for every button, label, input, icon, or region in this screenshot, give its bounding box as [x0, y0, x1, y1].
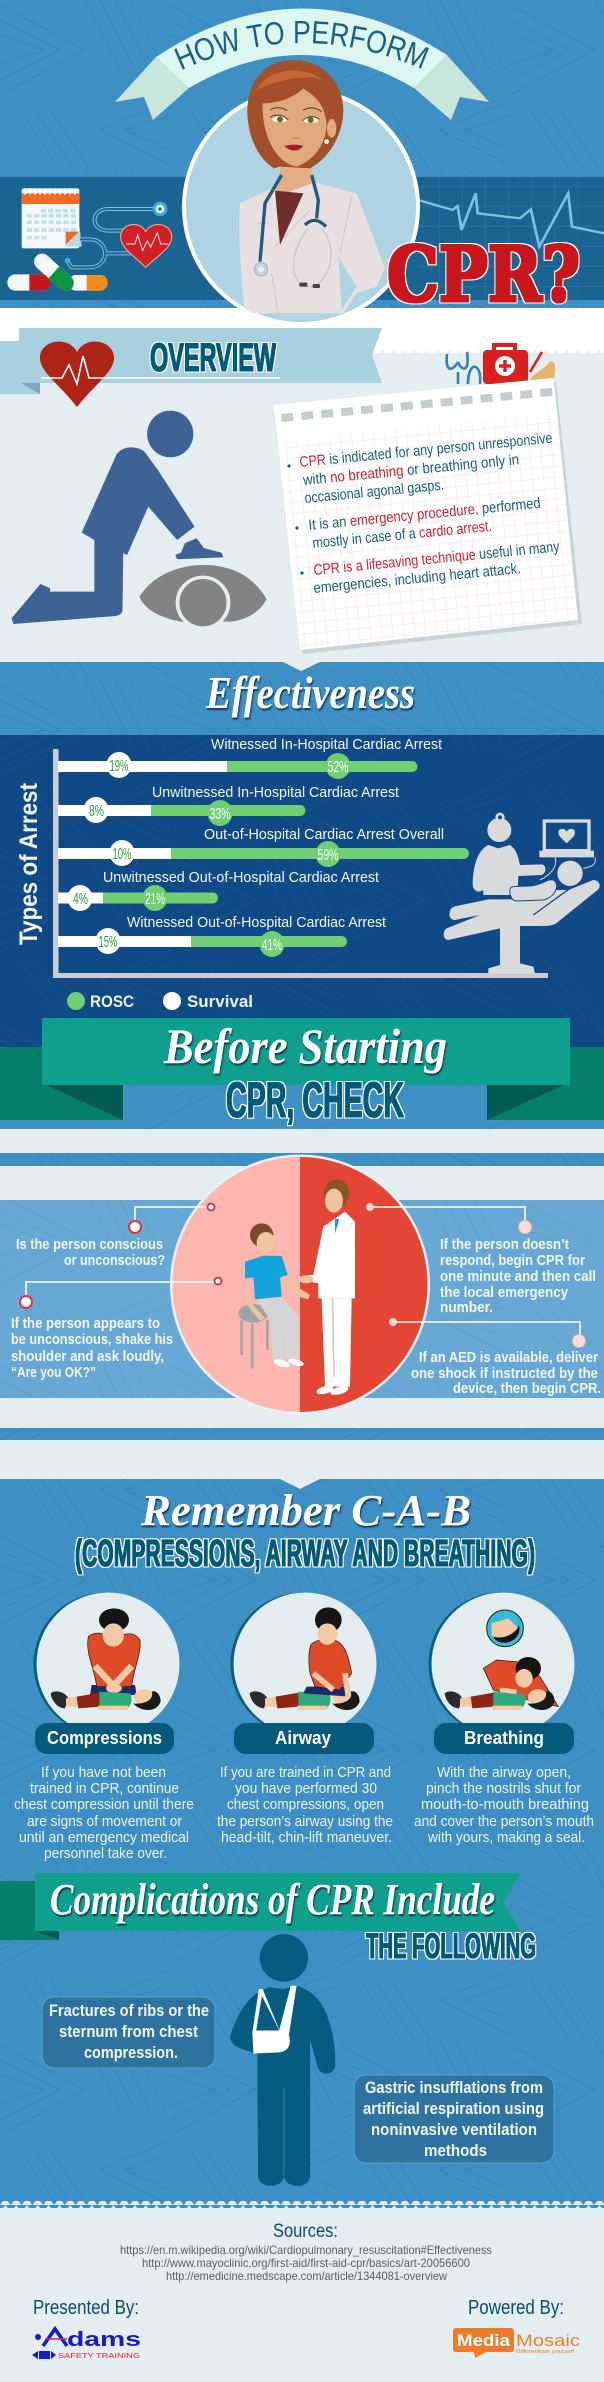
- circle illustration: [170, 1154, 430, 1414]
- y-axis title: Types of Arrest: [15, 782, 43, 945]
- step: airway: head-tilt, chin-lift maneuver.: [221, 1830, 392, 1846]
- figure: doctor: [299, 1179, 355, 1397]
- step: compressions: chest compression until there: [14, 1797, 194, 1813]
- bar: unwitnessed out-of-hospital: [58, 870, 379, 911]
- ecg monitor background: [418, 178, 604, 300]
- bar: unwitnessed in-hospital: Unwitnessed In-Hospital Cardiac Arrest: [152, 785, 399, 801]
- icon: heart: [40, 342, 280, 407]
- heading: complications: Complications of CPR Include: [50, 1875, 495, 1924]
- bar: witnessed in-hospital: 52%: [328, 759, 348, 776]
- powered by: media mosaic: Powered By:: [468, 2297, 564, 2319]
- sources: http://www.mayoclinic.org/first-aid/first-aid-cpr/basics/art-20056600: [142, 2256, 470, 2270]
- text: shake shoulder: If the person appears to: [11, 1315, 160, 1332]
- step: airway: chest compressions, open: [227, 1797, 384, 1813]
- note text: [287, 430, 561, 597]
- bar: witnessed out-of-hospital: Witnessed Out-of-Hospital Cardiac Arrest: [127, 915, 386, 931]
- presented by: adams: Presented By:: [33, 2297, 139, 2319]
- text: shake shoulder: be unconscious, shake his: [11, 1331, 173, 1348]
- step: compressions: [14, 1592, 194, 1862]
- panel: before starting ribbon: [0, 1018, 604, 1129]
- figure: chest compressions: [51, 1608, 161, 1710]
- complications ribbon: [0, 1873, 521, 1940]
- text: begin cpr: respond, begin CPR for: [440, 1252, 585, 1269]
- heading: before starting: Before Starting: [163, 1018, 447, 1074]
- presented by: adams: [32, 2297, 141, 2360]
- connector end markers: [20, 1203, 586, 1348]
- callout: fractures: [42, 1997, 215, 2068]
- text: shake shoulder: [11, 1315, 173, 1381]
- note text: CPR is a lifesaving technique useful in many: [313, 538, 561, 579]
- logo: adams safety training: SAFETY TRAINING: [58, 2353, 140, 2360]
- step: airway: If you are trained in CPR and: [220, 1765, 391, 1781]
- icon: cpr silhouette: [12, 411, 267, 628]
- step: compressions: are signs of movement or: [27, 1814, 182, 1830]
- bar: unwitnessed out-of-hospital: Unwitnessed Out-of-Hospital Cardiac Arrest: [103, 870, 379, 886]
- bar: witnessed out-of-hospital: 15%: [98, 934, 118, 951]
- step: breathing: mouth-to-mouth breathing: [421, 1797, 589, 1813]
- bar: out-of-hospital overall: Out-of-Hospital Cardiac Arrest Overall: [204, 827, 444, 843]
- figure: seated patient: [238, 1223, 310, 1369]
- title ribbon: [115, 8, 489, 120]
- bar chart: [58, 737, 469, 957]
- step: compressions: If you have not been: [41, 1765, 166, 1781]
- callout: gastric insufflations: Gastric insufflations from: [365, 2078, 543, 2097]
- chart axes: [53, 749, 548, 978]
- text: conscious check: [16, 1236, 165, 1269]
- step: breathing: with yours, making a seal.: [427, 1830, 585, 1846]
- note text: emergencies, including heart attack.: [313, 560, 521, 597]
- bar: witnessed in-hospital: [58, 737, 442, 779]
- heading: effectiveness: Effectiveness: [205, 667, 415, 718]
- icon: pills: [7, 250, 108, 294]
- callout: fractures: Fractures of ribs or the: [49, 2001, 209, 2020]
- bar: witnessed out-of-hospital: [58, 915, 386, 957]
- logo: adams safety training: dams: [67, 2329, 141, 2351]
- chart legend: Survival: [187, 992, 253, 1011]
- bar: unwitnessed out-of-hospital: 21%: [145, 891, 165, 908]
- step: compressions: personnel take over.: [44, 1846, 167, 1862]
- callout: fractures: sternum from chest: [59, 2022, 198, 2041]
- text: conscious check: or unconscious?: [64, 1252, 165, 1269]
- text: shake shoulder: shoulder and ask loudly,: [11, 1348, 164, 1365]
- powered by: media mosaic: [453, 2297, 581, 2358]
- step: compressions: Compressions: [47, 1728, 162, 1748]
- bar: witnessed in-hospital: 19%: [110, 758, 128, 775]
- step: compressions: trained in CPR, continue: [30, 1781, 179, 1797]
- bar: out-of-hospital overall: [58, 827, 469, 867]
- text: shake shoulder: “Are you OK?”: [11, 1364, 96, 1381]
- callout: gastric insufflations: noninvasive ventilation: [371, 2120, 537, 2139]
- logo: adams safety training: [32, 2329, 141, 2360]
- header panel: [0, 0, 604, 353]
- bar: unwitnessed in-hospital: 8%: [89, 803, 104, 820]
- bar: witnessed out-of-hospital: 41%: [262, 937, 282, 954]
- note binding strip: [281, 388, 553, 422]
- icon: calendar: [22, 188, 82, 248]
- logo: media mosaic: Media: [457, 2331, 511, 2350]
- overview ribbon: [0, 328, 382, 394]
- text: begin cpr: number.: [440, 1299, 493, 1316]
- step: breathing: With the airway open,: [437, 1765, 571, 1781]
- note text: with no breathing or breathing only in: [301, 451, 520, 489]
- callout: gastric insufflations: methods: [424, 2141, 487, 2160]
- figure: mouth to mouth: [445, 1610, 558, 1710]
- callout: fractures: compression.: [84, 2043, 178, 2062]
- panel: remember c-a-b: [0, 1479, 604, 2208]
- step: airway: Airway: [275, 1728, 331, 1748]
- icon: patient in treatment chair: [444, 813, 600, 973]
- sources: Sources:: [273, 2221, 338, 2242]
- step: breathing: and cover the person’s mouth: [414, 1814, 594, 1830]
- heading: cpr check: CPR, CHECK: [226, 1072, 404, 1128]
- step: compressions: until an emergency medical: [19, 1830, 189, 1846]
- connector lines: [26, 1207, 580, 1336]
- sources: https://en.m.wikipedia.org/wiki/Cardiopulmonary_resuscitation#Effectiveness: [120, 2243, 492, 2257]
- panel: overview: [0, 328, 604, 662]
- step: breathing: Breathing: [464, 1728, 544, 1748]
- logo: media mosaic: [453, 2328, 581, 2358]
- panel: complications: [0, 1873, 554, 2186]
- bar: witnessed in-hospital: Witnessed In-Hospital Cardiac Arrest: [211, 737, 442, 753]
- chart legend: [67, 992, 253, 1011]
- title ribbon: HOW TO PERFORM: [174, 21, 429, 70]
- bar: unwitnessed in-hospital: [58, 785, 399, 826]
- logo: media mosaic: Mosaic: [516, 2331, 581, 2350]
- text: aed: [411, 1349, 601, 1397]
- text: begin cpr: If the person doesn’t: [440, 1236, 569, 1253]
- text: conscious check: Is the person conscious: [16, 1236, 163, 1253]
- bar: unwitnessed out-of-hospital: 4%: [73, 891, 88, 908]
- step: airway: the person’s airway using the: [217, 1814, 393, 1830]
- figure: person with arm sling: [230, 1934, 335, 2186]
- icon: stethoscope and heart: [65, 202, 172, 267]
- heading: overview: OVERVIEW: [150, 336, 276, 380]
- heading: remember c-a-b: Remember C-A-B: [140, 1486, 471, 1535]
- bar: out-of-hospital overall: 59%: [318, 847, 338, 864]
- step: airway: [217, 1592, 393, 1846]
- doctor portrait: [184, 60, 418, 324]
- sources: [120, 2221, 492, 2283]
- note text: CPR is indicated for any person unresponsive: [299, 430, 553, 471]
- icon: medical kit and stethoscope: [447, 345, 555, 384]
- bar: unwitnessed in-hospital: 33%: [210, 806, 230, 823]
- step: breathing: [414, 1592, 594, 1846]
- footer panel: [0, 2201, 604, 2382]
- logo: media mosaic: Differentiate yourself: [516, 2349, 575, 2355]
- panel: effectiveness: [0, 662, 604, 1047]
- text: begin cpr: [440, 1236, 596, 1316]
- chart legend: ROSC: [90, 992, 134, 1011]
- note text: It is an emergency procedure, performed: [308, 495, 541, 534]
- callout: gastric insufflations: artificial respiration using: [363, 2099, 544, 2118]
- step: airway: you have performed 30: [235, 1781, 377, 1797]
- figure: head tilt: [250, 1607, 360, 1710]
- note text: occasional agonal gasps.: [304, 477, 445, 507]
- note text: mostly in case of a cardio arrest.: [312, 518, 493, 552]
- sources: http://emedicine.medscape.com/article/1344081-overview: [166, 2269, 447, 2283]
- bar: out-of-hospital overall: 10%: [112, 846, 132, 863]
- note card: [274, 378, 582, 654]
- step: breathing: pinch the nostrils shut for: [426, 1781, 581, 1797]
- panel: checks: [0, 1153, 604, 1440]
- callout: gastric insufflations: [354, 2075, 554, 2163]
- text: begin cpr: the local emergency: [440, 1284, 569, 1301]
